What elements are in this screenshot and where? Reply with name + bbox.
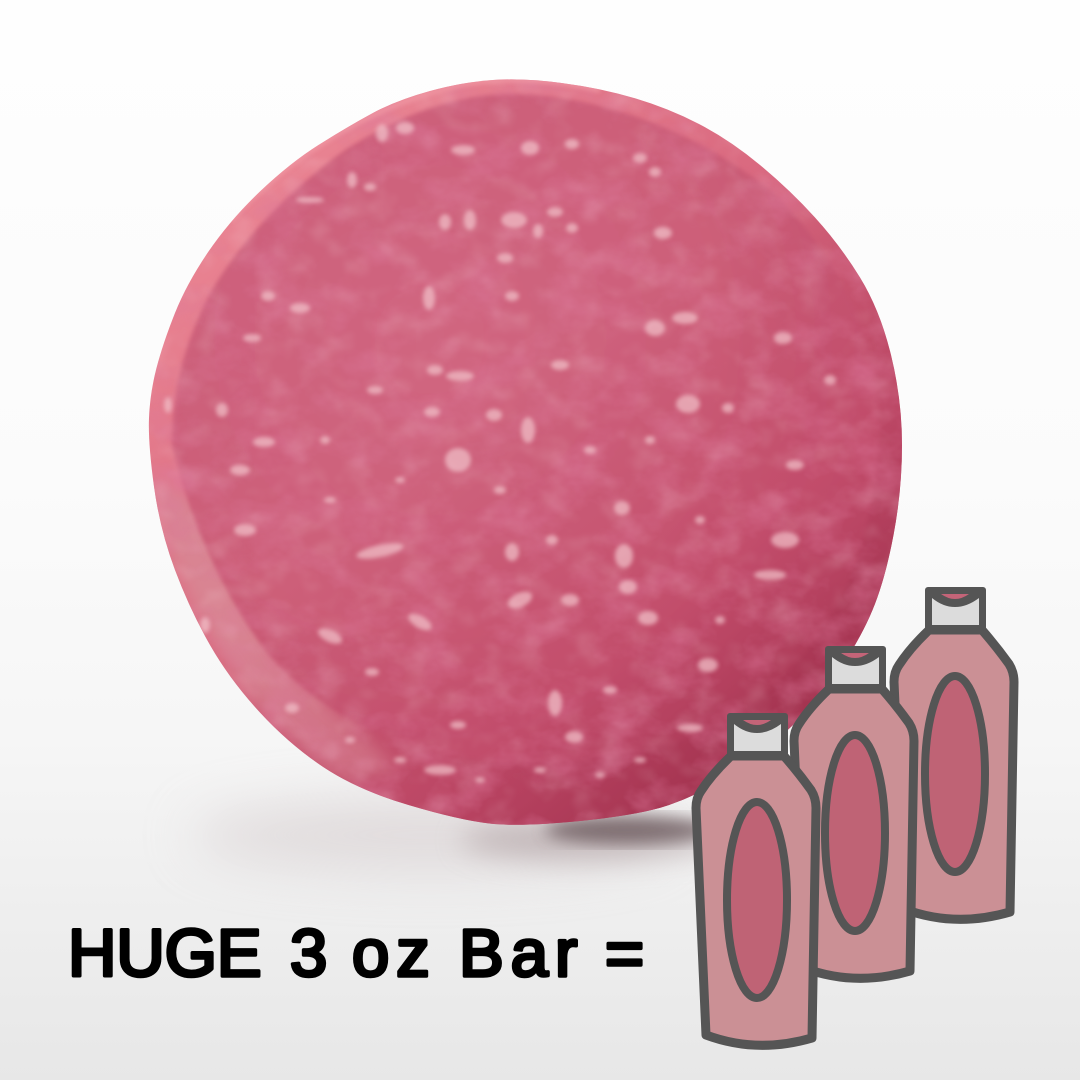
bar darker lower right tint bbox=[262, 244, 902, 825]
bar mottled red texture bbox=[130, 70, 920, 840]
bar pale lower-left rim bbox=[152, 480, 400, 780]
bar top face bbox=[171, 93, 800, 714]
icon: middle shampoo bottle bbox=[794, 646, 914, 978]
caption: HUGE 3 oz Bar =: = bbox=[605, 916, 644, 991]
caption: HUGE 3 oz Bar =: HUGE bbox=[68, 916, 262, 991]
rim highlight top bbox=[230, 80, 600, 220]
cast shadow under bar bbox=[190, 799, 720, 871]
icon: back shampoo bottle bbox=[894, 587, 1014, 919]
bar light flecks bbox=[164, 122, 836, 783]
caption: HUGE 3 oz Bar =: Bar bbox=[459, 916, 584, 991]
bar pale speckle texture bbox=[156, 93, 899, 824]
caption: HUGE 3 oz Bar =: 3 bbox=[290, 916, 327, 991]
bar outer rim bbox=[130, 70, 920, 840]
shampoo bar photo bbox=[130, 70, 920, 840]
icon: front shampoo bottle bbox=[696, 713, 816, 1045]
caption: HUGE 3 oz Bar =: oz bbox=[352, 916, 437, 991]
